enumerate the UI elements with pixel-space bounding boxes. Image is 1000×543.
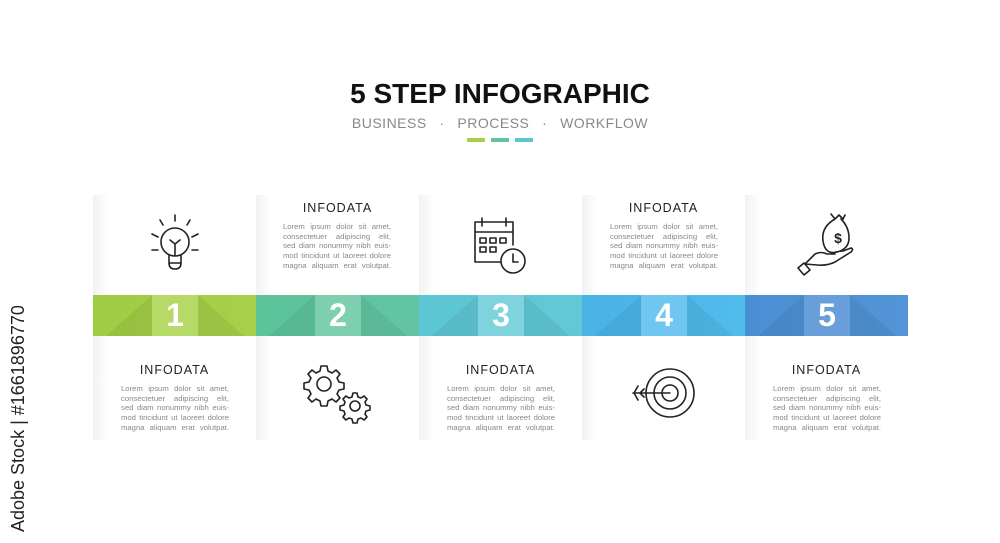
text block: step 1: INFODATA — [140, 363, 209, 377]
step 4: 4 — [655, 297, 673, 333]
icon: calendar — [474, 217, 526, 274]
subtitle: BUSINESS · PROCESS · WORKFLOW — [352, 115, 648, 131]
step 1: 1 — [166, 297, 184, 333]
text block: step 1: sed diam nonummy nibh euis- — [121, 403, 229, 412]
text block: step 4: consectetuer adipiscing elit, — [610, 232, 718, 241]
step 3 — [419, 295, 582, 336]
text block: step 2: INFODATA — [303, 201, 372, 215]
text block: step 3: sed diam nonummy nibh euis- — [447, 403, 555, 412]
text block: step 5: magna aliquam erat volutpat. — [773, 423, 881, 432]
text block: step 3: mod tincidunt ut laoreet dolore — [447, 413, 555, 422]
step 5: 5 — [818, 297, 836, 333]
text block: step 1: mod tincidunt ut laoreet dolore — [121, 413, 229, 422]
step 3: 3 — [492, 297, 510, 333]
text block: step 3 — [447, 363, 555, 432]
icon: money hand — [797, 213, 854, 276]
text block: step 3: consectetuer adipiscing elit, — [447, 394, 555, 403]
color bars — [467, 138, 533, 142]
watermark side text: Adobe Stock | #1661896770 — [8, 305, 28, 532]
text block: step 1: consectetuer adipiscing elit, — [121, 394, 229, 403]
icon: money hand: $ — [834, 230, 842, 246]
icon: gears — [303, 365, 371, 424]
text block: step 5: INFODATA — [792, 363, 861, 377]
step 2: 2 — [329, 297, 347, 333]
text block: step 4: INFODATA — [629, 201, 698, 215]
icon: target — [632, 368, 695, 418]
step 4 — [582, 295, 745, 336]
step 2 — [256, 295, 419, 336]
text block: step 2: Lorem ipsum dolor sit amet, — [283, 222, 391, 231]
text block: step 3: INFODATA — [466, 363, 535, 377]
step 1 — [93, 295, 256, 336]
text block: step 3: magna aliquam erat volutpat. — [447, 423, 555, 432]
text block: step 4: magna aliquam erat volutpat. — [610, 261, 718, 270]
title: 5 STEP INFOGRAPHIC — [350, 78, 650, 109]
text block: step 4: mod tincidunt ut laoreet dolore — [610, 251, 718, 260]
icon: lightbulb — [151, 214, 199, 270]
columns — [93, 195, 256, 440]
text block: step 3: Lorem ipsum dolor sit amet, — [447, 384, 555, 393]
text block: step 5: sed diam nonummy nibh euis- — [773, 403, 881, 412]
text block: step 2 — [283, 201, 391, 270]
text block: step 4 — [610, 201, 718, 270]
step 5 — [745, 295, 908, 336]
text block: step 5 — [773, 363, 881, 432]
text block: step 1: magna aliquam erat volutpat. — [121, 423, 229, 432]
text block: step 5: consectetuer adipiscing elit, — [773, 394, 881, 403]
text block: step 2: magna aliquam erat volutpat. — [283, 261, 391, 270]
text block: step 1 — [121, 363, 229, 432]
text block: step 5: mod tincidunt ut laoreet dolore — [773, 413, 881, 422]
text block: step 2: mod tincidunt ut laoreet dolore — [283, 251, 391, 260]
text block: step 2: consectetuer adipiscing elit, — [283, 232, 391, 241]
text block: step 4: Lorem ipsum dolor sit amet, — [610, 222, 718, 231]
text block: step 4: sed diam nonummy nibh euis- — [610, 241, 718, 250]
band — [93, 295, 908, 336]
text block: step 5: Lorem ipsum dolor sit amet, — [773, 384, 881, 393]
text block: step 2: sed diam nonummy nibh euis- — [283, 241, 391, 250]
text block: step 1: Lorem ipsum dolor sit amet, — [121, 384, 229, 393]
